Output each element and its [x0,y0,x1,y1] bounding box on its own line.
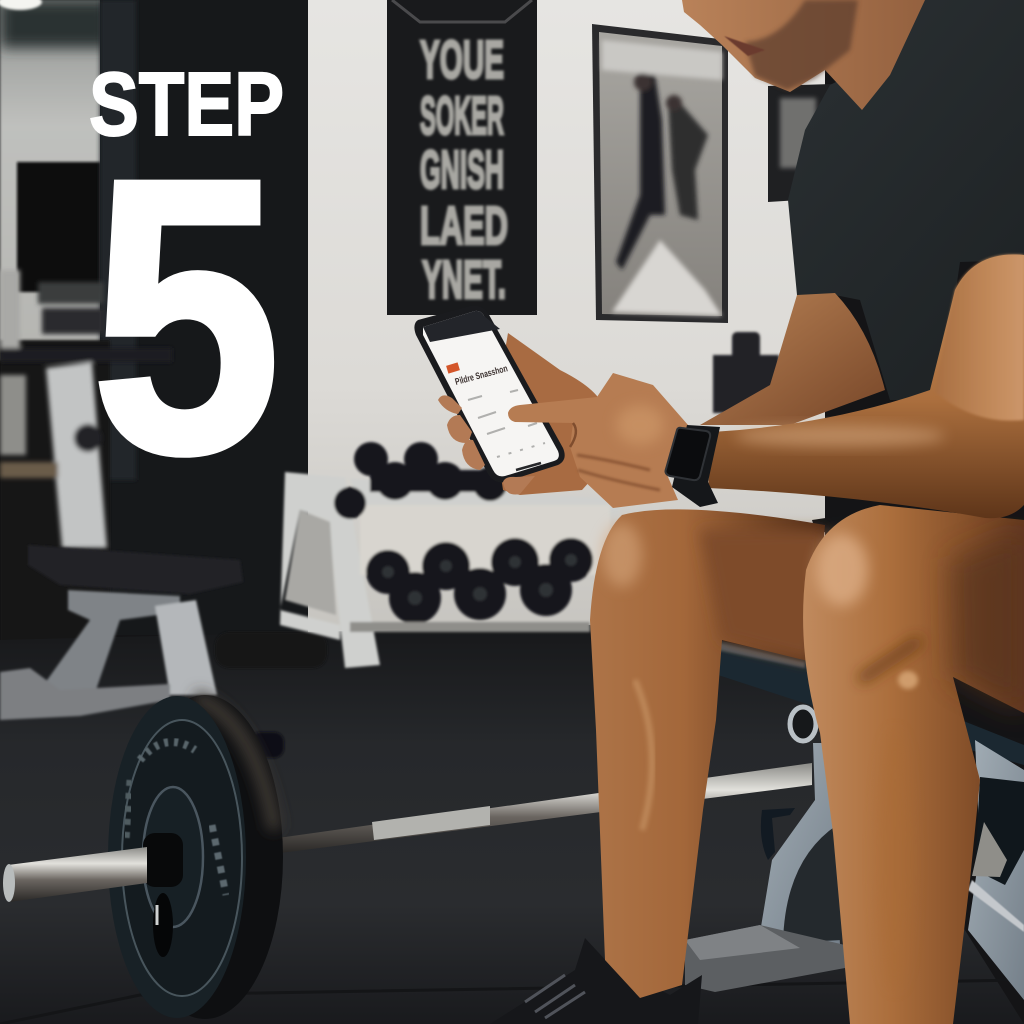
foreground leg, right [803,505,1024,1024]
front hand with pointing finger [508,373,688,508]
foreground leg, left [590,509,825,998]
screen heading: Pildre Snasshon [454,363,509,388]
bar shaft [278,763,812,853]
app icon [446,362,460,374]
rear frame [968,740,1024,1000]
weight bench in background [0,545,327,720]
bar sleeve [4,847,147,902]
poster: motivational text: YNET. [422,250,506,310]
dumbbell rack [280,442,620,668]
bar collar [143,833,183,887]
man: near arm [708,254,1024,518]
man: face and neck [682,0,925,110]
poster: motivational text: GNISH [420,140,504,200]
heading: STEP: STEP [89,55,284,155]
shoe [490,938,702,1024]
poster: motivational text [387,0,537,315]
left background gym machine [0,270,172,548]
foreground bench [685,640,1024,1000]
poster: motivational text: LAED [420,196,508,256]
smartwatch [666,425,720,507]
poster: athletes photo [592,24,728,323]
phone header [423,311,500,342]
smartphone [414,306,565,482]
phone screen [423,311,559,476]
fingers wrapping phone edge [438,395,535,494]
poster: small framed picture [768,84,832,202]
bench cushion [717,640,1024,765]
heading: step number 5: 5 [91,98,281,534]
back hand behind phone [500,333,600,495]
poster: motivational text: YOUE [420,30,504,90]
barbell [3,695,812,1019]
bar end behind plate [250,732,284,758]
bench upright [758,743,840,945]
man: torso in dark t-shirt [680,0,1024,540]
poster: motivational text: SOKER [420,86,504,146]
phone body [414,306,565,482]
background kettle shapes behind arm [713,332,779,413]
bench ring bracket [790,707,816,741]
small bracket [761,808,795,860]
weight plate [108,695,283,1019]
man: far arm [700,293,885,425]
bench base [685,925,845,992]
